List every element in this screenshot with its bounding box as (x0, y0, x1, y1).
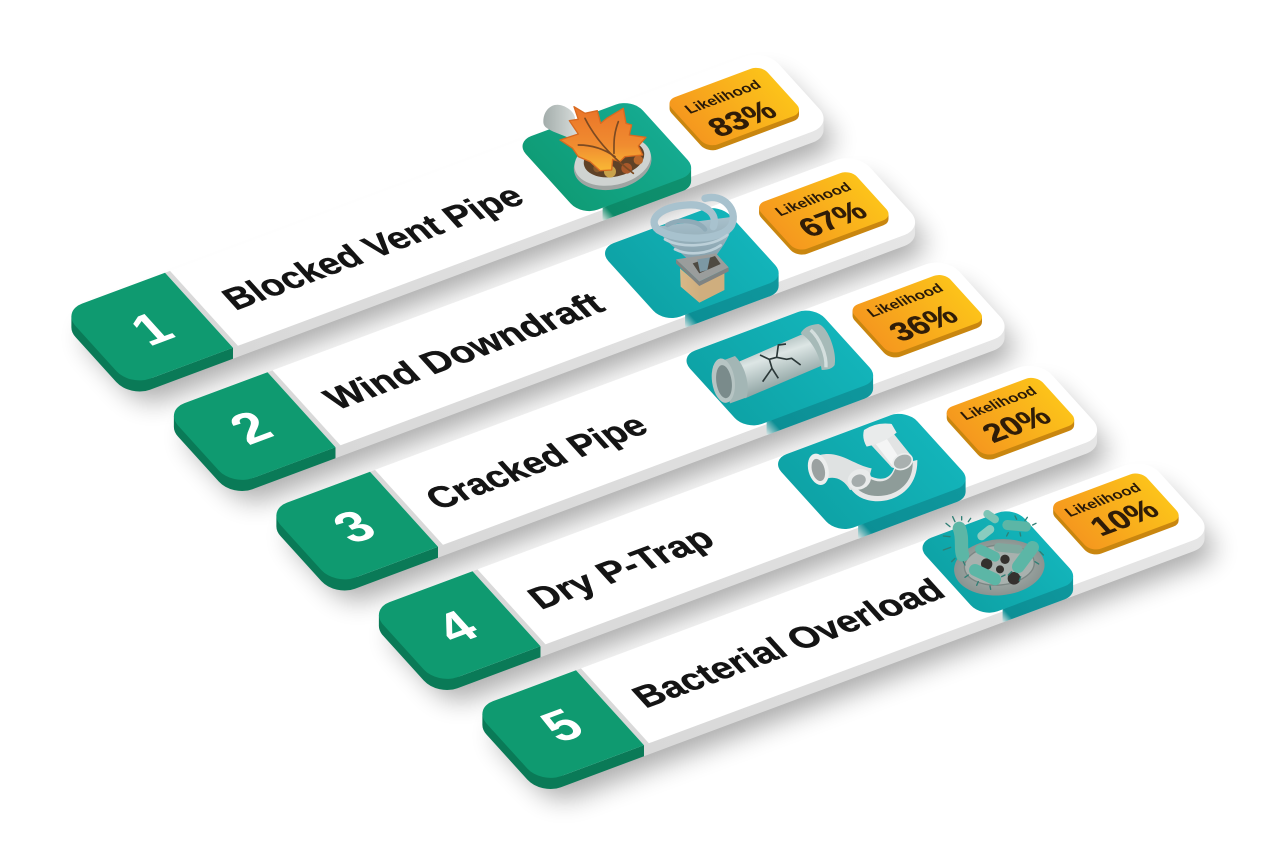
likelihood card (661, 65, 807, 153)
bar body (54, 49, 840, 397)
likelihood card: 20% (975, 401, 1058, 448)
likelihood card: Likelihood (864, 281, 947, 320)
likelihood card (751, 169, 897, 257)
likelihood card: Likelihood (772, 180, 855, 219)
panel: cause 5 Bacterial Overload (465, 458, 1224, 804)
panel: cause 2 Wind Downdraft (157, 153, 934, 507)
likelihood card: Likelihood (681, 78, 765, 117)
shadow (75, 71, 843, 407)
likelihood card (939, 375, 1082, 462)
icon tile (770, 409, 982, 543)
cause name: Blocked Vent Pipe (214, 178, 532, 316)
bar body (362, 360, 1114, 696)
rank number 5: 5 (530, 700, 595, 752)
icon: maple leaf in vent pipe (543, 105, 656, 197)
rank number 2: 2 (218, 402, 284, 454)
panel: cause 3 Cracked Pipe (259, 257, 1024, 606)
likelihood card: 83% (701, 95, 784, 143)
shadow (178, 175, 934, 507)
cause name: Bacterial Overload (624, 572, 953, 714)
bar body (465, 458, 1221, 795)
likelihood card (1045, 471, 1187, 557)
shadow (280, 279, 1024, 606)
likelihood card: 10% (1083, 494, 1166, 542)
icon tile (915, 507, 1089, 627)
icon: cracked pipe (709, 324, 835, 404)
rank number 1: 1 (119, 303, 185, 355)
likelihood card: Likelihood (957, 384, 1041, 423)
shadow (382, 382, 1116, 706)
likelihood card: Likelihood (1061, 481, 1145, 520)
bar body (157, 153, 932, 497)
panel: cause 1 Blocked Vent Pipe (54, 49, 843, 407)
likelihood card: 67% (791, 195, 874, 243)
icon tile (515, 99, 707, 225)
icon: tornado over chimney (654, 197, 734, 303)
icon: dry P-trap pipe (805, 423, 917, 501)
rank number 3: 3 (322, 501, 388, 553)
likelihood card: 36% (882, 300, 965, 347)
cause name: Cracked Pipe (417, 408, 656, 516)
shadow (486, 480, 1224, 804)
rank number 4: 4 (424, 602, 490, 654)
bar body (259, 257, 1021, 596)
icon tile (679, 306, 889, 440)
cause name: Dry P-Trap (519, 520, 722, 616)
icon: bacteria over drain (943, 514, 1047, 599)
likelihood card (844, 272, 990, 360)
icon tile (598, 204, 795, 332)
panel: cause 4 Dry P-Trap (362, 360, 1116, 706)
cause name: Wind Downdraft (315, 286, 612, 416)
